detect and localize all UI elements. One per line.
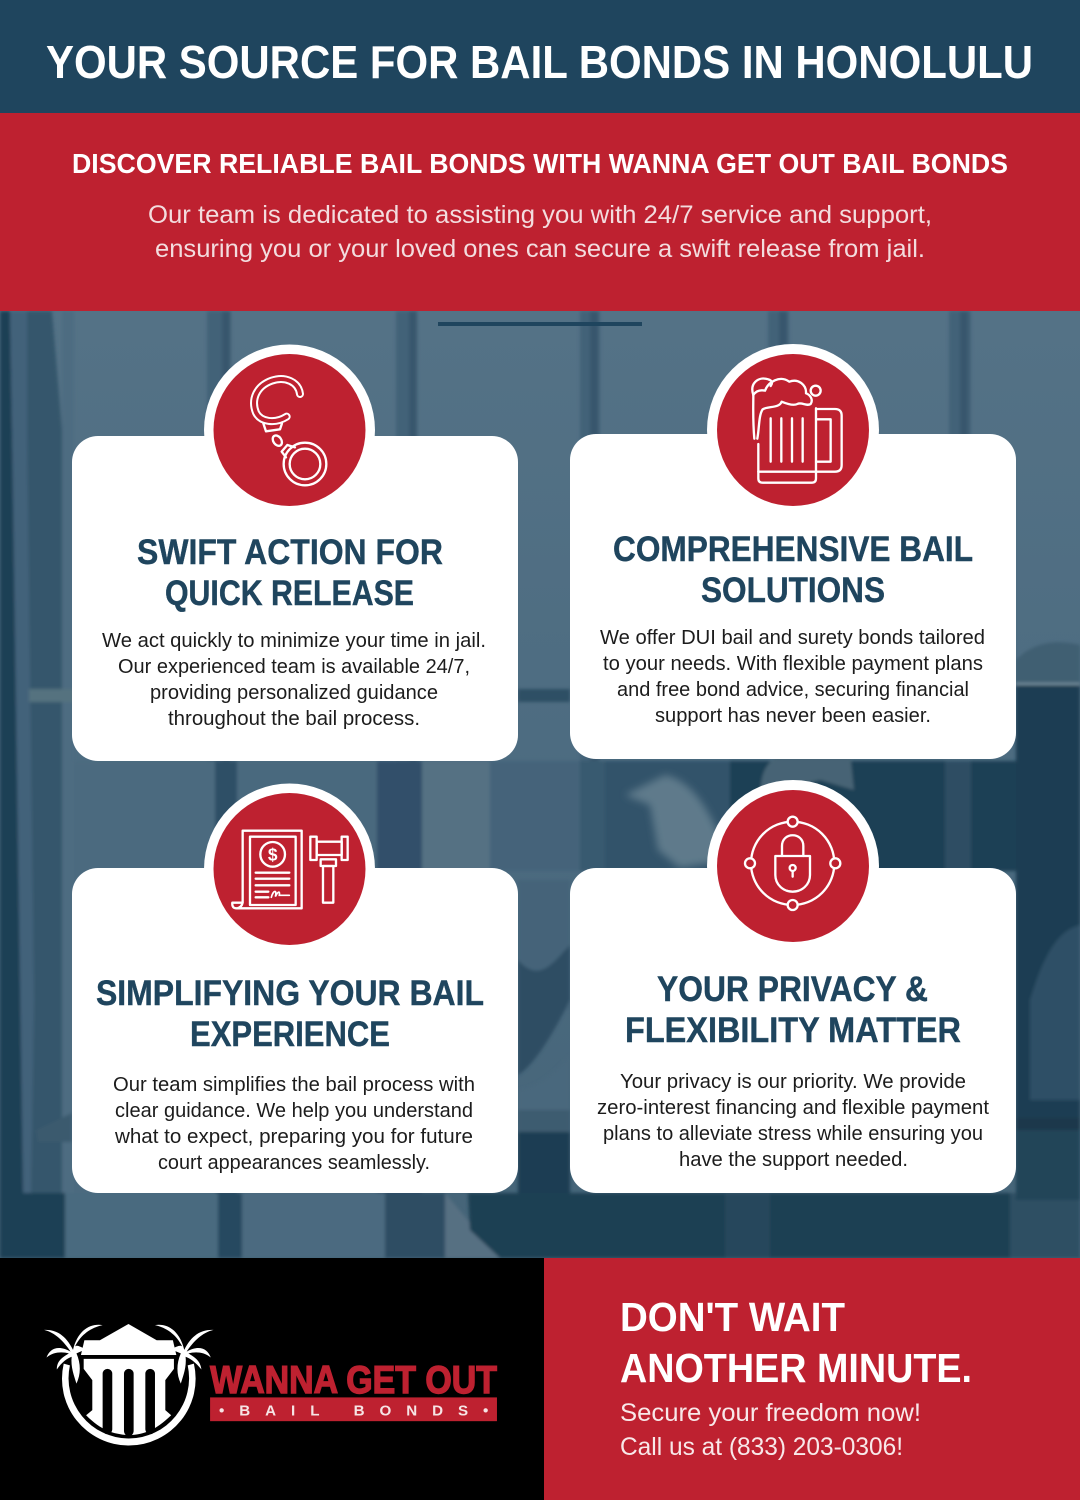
body text [102,629,486,730]
heading [613,530,973,610]
heading: SWIFT ACTION FOR [137,533,443,572]
body text: support has never been easier. [655,704,931,727]
figure shadow behind mid-right [728,759,1018,873]
body text [597,1070,989,1171]
left wall column [0,311,71,1195]
body text: Our experienced team is available 24/7, [118,655,470,678]
logo [44,1324,497,1446]
call to action text [620,1399,921,1461]
body text: plans to alleviate stress while ensuring you [603,1122,983,1145]
heading [625,970,961,1050]
call to action text: Secure your freedom now! [620,1399,921,1427]
panel: swift action [72,344,518,761]
body text: throughout the bail process. [168,707,420,730]
icon: handcuffs [204,344,375,516]
body text: Your privacy is our priority. We provide [620,1070,966,1093]
call to action text: Call us at (833) 203-0306! [620,1433,903,1461]
heading: FLEXIBILITY MATTER [625,1011,961,1050]
intro text [148,201,932,263]
body text: We act quickly to minimize your time in jail. [102,629,486,652]
body text: what to expect, preparing you for future [114,1125,473,1148]
call to action heading [620,1294,972,1391]
heading [96,974,484,1054]
body text [113,1073,475,1174]
body text: and free bond advice, securing financial [617,678,969,701]
footer call to action panel [544,1258,1080,1500]
intro band [0,113,1080,311]
body text: to your needs. With flexible payment plans [603,652,983,675]
body text: zero-interest financing and flexible payment [597,1096,989,1119]
intro heading: DISCOVER RELIABLE BAIL BONDS WITH WANNA GET OUT BAIL BONDS [72,148,1008,179]
body text: have the support needed. [679,1148,908,1171]
logo: •BAIL BONDS• [219,1402,488,1419]
panel: privacy and flexibility [570,780,1016,1193]
call to action heading: DON'T WAIT [620,1294,845,1340]
lower left wall [209,762,214,810]
body text: Our team simplifies the bail process with [113,1073,475,1096]
bottom strip [22,1192,66,1258]
body text [600,626,985,727]
heading: QUICK RELEASE [165,574,414,613]
icon: bond document and gavel: $ [268,845,278,865]
center strip figure [518,880,570,1010]
intro text: ensuring you or your loved ones can secure a swift release from jail. [155,235,925,263]
body text: court appearances seamlessly. [158,1151,430,1174]
icon: beer mug [707,344,879,516]
call to action heading: ANOTHER MINUTE. [620,1345,972,1391]
body text: providing personalized guidance [150,681,438,704]
heading [137,533,443,613]
heading: EXPERIENCE [190,1015,390,1054]
heading: YOUR PRIVACY & [657,970,928,1009]
blurred hand shape [625,775,728,868]
header band with title [0,0,1080,113]
right side figure [1016,642,1080,684]
panel: simplifying experience [72,784,518,1193]
heading: SIMPLIFYING YOUR BAIL [96,974,484,1013]
body text: We offer DUI bail and surety bonds tailored [600,626,985,649]
panel: comprehensive solutions [570,344,1016,759]
figure at center left [377,761,422,1258]
icon: bond document and gavel [204,784,375,954]
logo: WANNA GET OUT [210,1359,497,1402]
heading: COMPREHENSIVE BAIL [613,530,973,569]
body text: clear guidance. We help you understand [115,1099,473,1122]
icon: padlock [707,780,879,952]
heading: SOLUTIONS [701,571,885,610]
footer logo panel [0,1258,544,1500]
background: jail cell photo [0,311,1080,1258]
intro text: Our team is dedicated to assisting you with 24/7 service and support, [148,201,932,229]
